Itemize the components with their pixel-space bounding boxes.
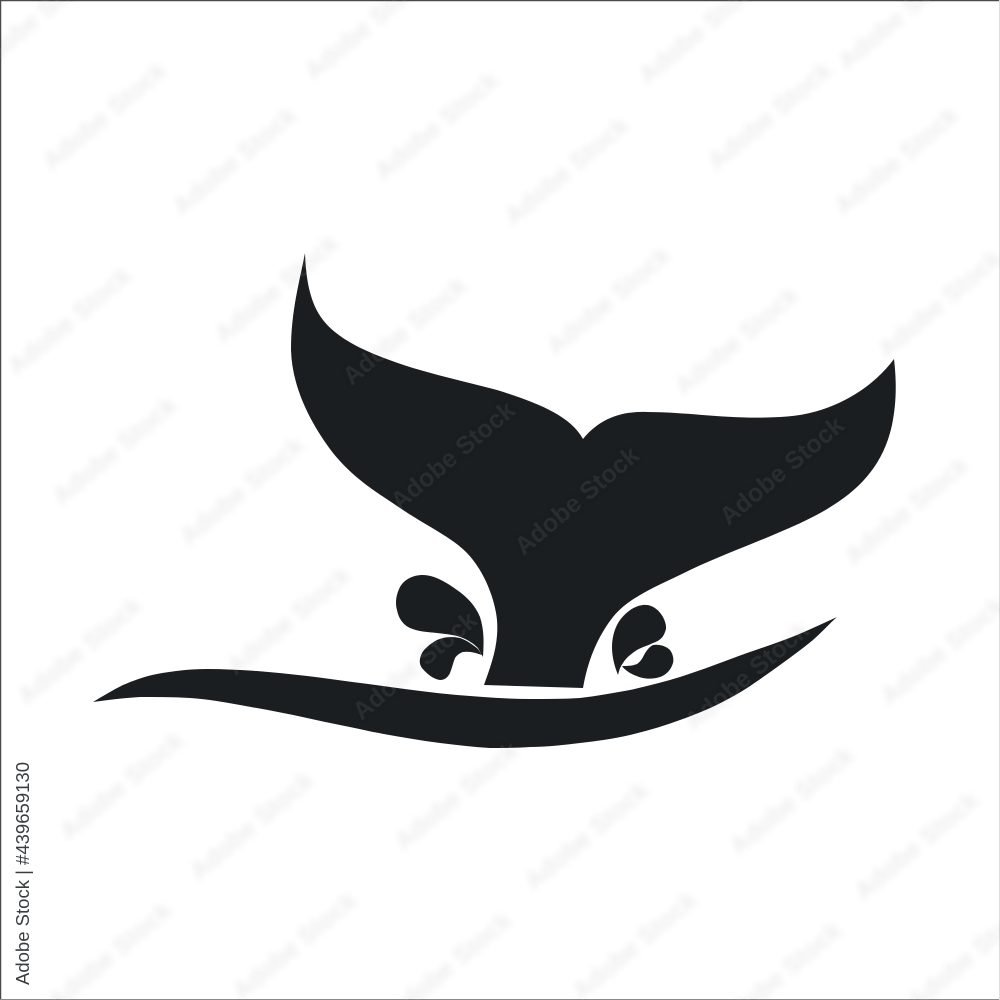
stock watermark pattern: Adobe Stock [702,56,837,176]
stock watermark pattern: Adobe Stock [829,101,964,221]
stock watermark pattern: Adobe Stock [519,776,654,896]
stock watermark pattern: Adobe Stock [347,606,482,726]
stock watermark pattern: Adobe Stock [369,66,504,186]
stock watermark pattern: Adobe Stock [174,431,309,551]
stock watermark pattern: Adobe Stock [2,261,137,381]
stock watermark pattern: Adobe Stock [47,391,182,511]
stock watermark pattern: Adobe Stock [714,411,849,531]
stock watermark pattern: Adobe Stock [509,441,644,561]
stock watermark pattern: Adobe Stock [839,451,974,571]
stock watermark pattern: Adobe Stock [12,591,147,711]
stock watermark pattern: Adobe Stock [167,101,302,221]
icon: left water splash [396,575,484,680]
stock watermark pattern: Adobe Stock [669,281,804,401]
stock watermark pattern: Adobe Stock [221,561,356,681]
text: stock image id: Adobe Stock | #439659130 [12,762,33,985]
stock watermark pattern: Adobe Stock [679,616,814,736]
stock watermark pattern: Adobe Stock [849,786,984,906]
icon: ocean wave [93,617,837,748]
stock watermark pattern: Adobe Stock [37,56,172,176]
stock watermark pattern: Adobe Stock [337,271,472,391]
stock watermark pattern: Adobe Stock [54,726,189,846]
stock watermark pattern: Adobe Stock [209,229,344,349]
stock watermark pattern: Adobe Stock [184,766,319,886]
stock watermark pattern: Adobe Stock [499,111,634,231]
stock watermark pattern: Adobe Stock [389,736,524,856]
icon: right water splash [612,605,673,679]
stock watermark pattern: Adobe Stock [385,396,520,516]
icon: whale tail fluke [291,253,896,688]
stock watermark pattern: Adobe Stock [541,241,676,361]
stock watermark pattern: Adobe Stock [724,741,859,861]
